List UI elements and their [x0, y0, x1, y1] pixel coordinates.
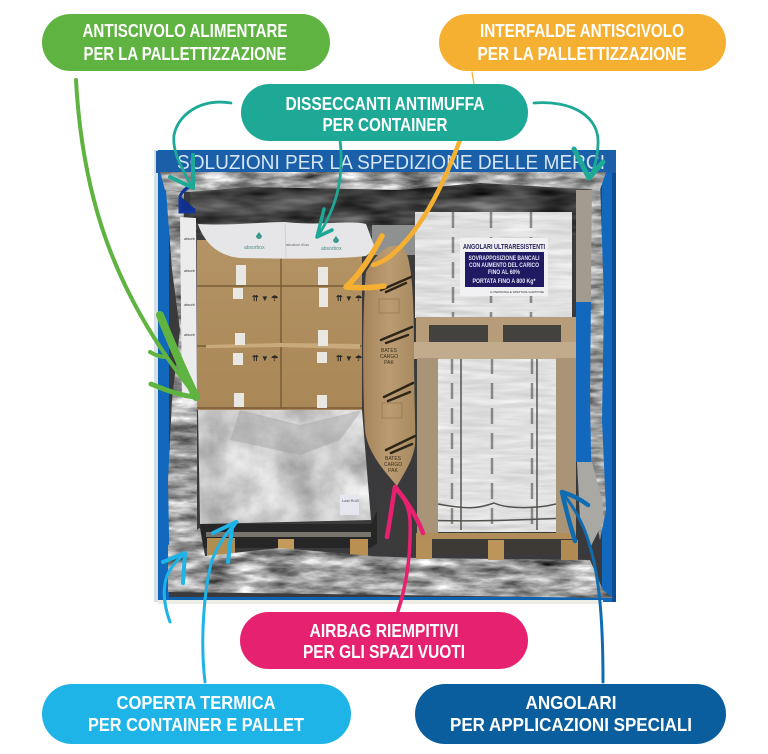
label: angolari: PER APPLICAZIONI SPECIALI [450, 715, 692, 735]
label: airbag riempitivi: PER GLI SPAZI VUOTI [303, 642, 465, 662]
label: airbag riempitivi: AIRBAG RIEMPITIVI [310, 621, 458, 641]
desiccant bag on boxes: istruzioni d'uso [286, 243, 309, 247]
thermal bubble cover on box: Last Rul3 [342, 498, 360, 503]
airbag: BATES [381, 348, 398, 354]
desiccant strip hanging left: absorb [184, 303, 195, 307]
thermal bubble cover on box [198, 410, 371, 524]
desiccant bag on boxes: absorbox [244, 245, 265, 251]
cardboard boxes: ⇈ ▼ ☂ [252, 354, 278, 363]
foil top lining [158, 172, 608, 194]
desiccant bag on boxes [198, 222, 375, 259]
arrow: teal centre [317, 140, 341, 237]
upper pallet [414, 317, 576, 359]
cardboard boxes: ⇈ ▼ ☂ [252, 294, 278, 303]
airbag: CARGO [380, 354, 398, 360]
label: disseccanti antimuffa [241, 84, 528, 141]
sign: angolari ultraresistenti [460, 238, 548, 296]
pallet under cover [200, 490, 417, 561]
cardboard boxes: ⇈ ▼ ☂ [336, 294, 362, 303]
label: disseccanti antimuffa: DISSECCANTI ANTIMUFFA [286, 94, 484, 114]
sign: angolari ultraresistenti: CON AUMENTO DEL CARICO [469, 262, 539, 269]
airbag: PAK [384, 360, 394, 366]
container frame [154, 150, 616, 602]
arrow: teal right [534, 103, 603, 178]
label: disseccanti antimuffa: PER CONTAINER [322, 115, 448, 135]
airbag [363, 246, 415, 486]
sign: angolari ultraresistenti: ANGOLARI ULTRARESISTENTI [463, 242, 545, 251]
desiccant strip hanging left: absorb [184, 237, 195, 241]
sign: angolari ultraresistenti: SOVRAPPOSIZIONE BANCALI [468, 255, 540, 262]
label: angolari [415, 684, 726, 744]
arrow: pink to airbag [387, 487, 423, 611]
arrow: orange to boxes [346, 72, 474, 288]
foil left lining [166, 190, 197, 544]
label: interfalde antiscivolo [439, 14, 726, 71]
label: angolari: ANGOLARI [526, 693, 616, 713]
airbag: PAK [388, 468, 398, 474]
ground strip [158, 600, 603, 604]
sign: angolari ultraresistenti: IL PERSONALE SPETTAVA GIAPPONE [490, 290, 544, 294]
label: coperta termica: COPERTA TERMICA [116, 693, 276, 713]
arrow: green to anti-slip sheet [76, 80, 196, 397]
cardboard corners [417, 358, 576, 534]
label: antiscivolo alimentare: ANTISCIVOLO ALIMENTARE [82, 21, 288, 41]
label: interfalde antiscivolo: INTERFALDE ANTISCIVOLO [480, 21, 684, 41]
wrapped rolls [415, 210, 575, 535]
header text band: SOLUZIONI PER LA SPEDIZIONE DELLE MERCI [177, 152, 605, 174]
label: coperta termica [42, 684, 351, 744]
arrow: teal left [170, 102, 231, 188]
desiccant strip hanging left [180, 186, 197, 404]
desiccant strip hanging left: absorb [184, 269, 195, 273]
arrows: cyan to thermal cover [163, 522, 237, 682]
sign: angolari ultraresistenti: FINO AL 60% [488, 269, 520, 276]
cardboard boxes [197, 240, 362, 410]
label: coperta termica: PER CONTAINER E PALLET [88, 715, 304, 735]
photo: container with goods [154, 150, 616, 604]
dark interior foil ceiling [190, 185, 585, 265]
label: antiscivolo alimentare [42, 14, 330, 71]
foil floor [168, 528, 613, 598]
desiccant bag on boxes: absorbox [321, 246, 342, 252]
airbag: CARGO [384, 462, 402, 468]
lower pallet [416, 533, 578, 560]
arrow: blue to corner profile [562, 492, 603, 682]
label: interfalde antiscivolo: PER LA PALLETTIZZAZIONE [478, 44, 686, 64]
label: antiscivolo alimentare: PER LA PALLETTIZZAZIONE [84, 44, 286, 64]
cardboard boxes: ⇈ ▼ ☂ [336, 354, 362, 363]
sign: angolari ultraresistenti: PORTATA FINO A 800 Kg* [472, 278, 536, 285]
desiccant strip hanging left: absorb [184, 333, 195, 337]
right pallet stack [414, 210, 578, 560]
airbag: BATES [385, 456, 402, 462]
label: airbag riempitivi [240, 612, 528, 669]
right column and foil [576, 178, 608, 548]
